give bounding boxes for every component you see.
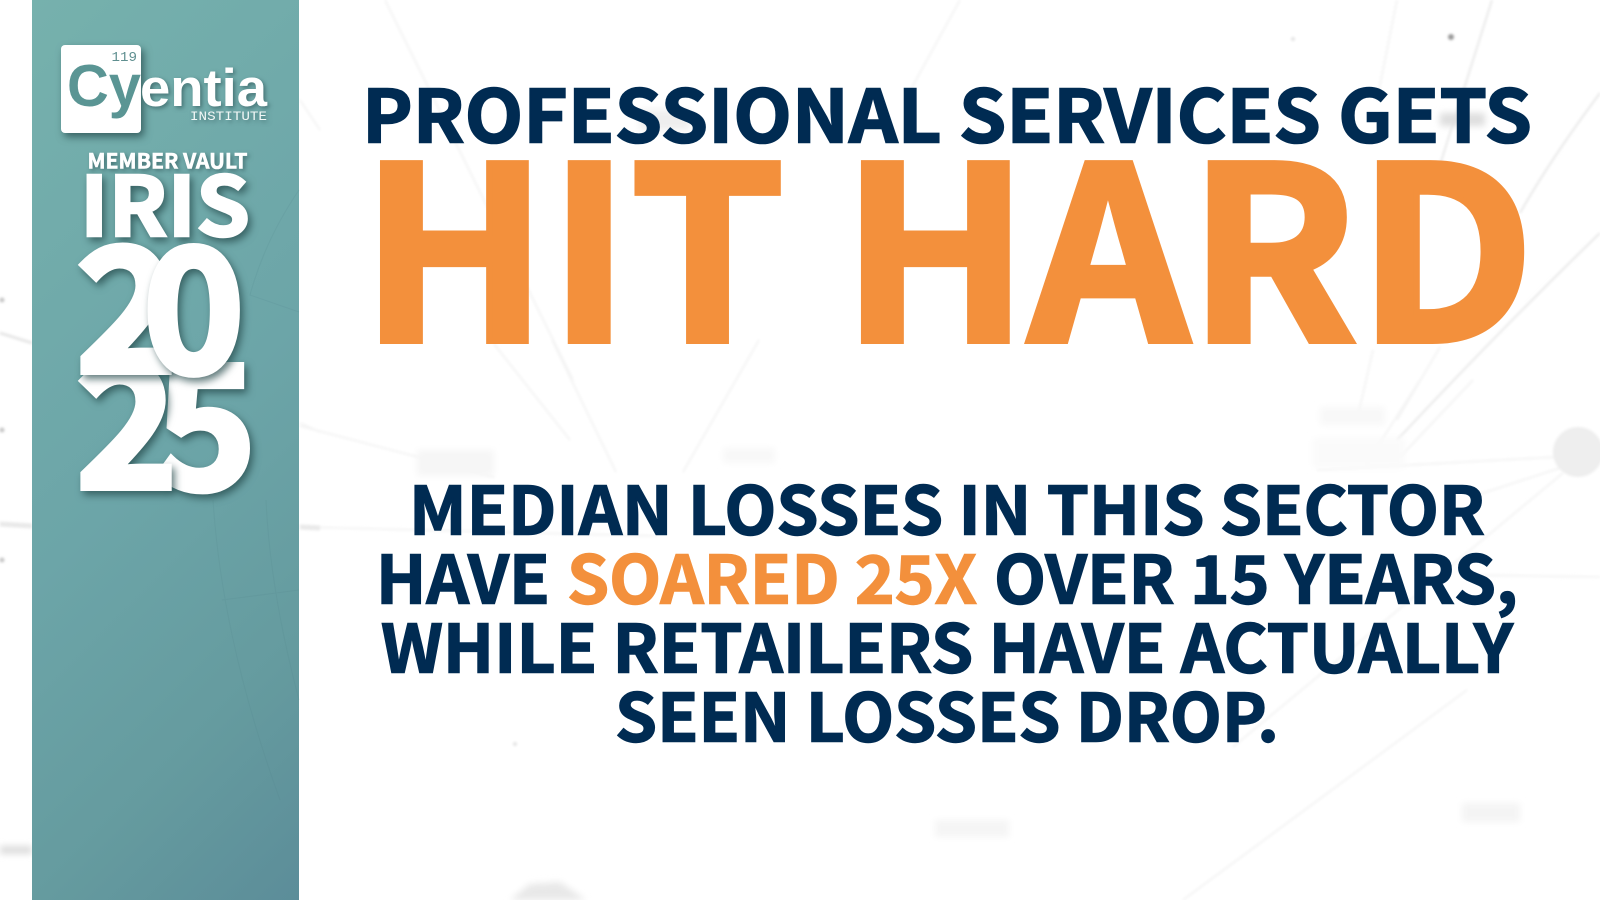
body line 1: MEDIAN LOSSES IN THIS SECTOR (409, 458, 1485, 554)
sidebar year 2025 (76, 172, 256, 539)
digit 0: 0 (143, 172, 244, 422)
sidebar label: IRIS: IRIS (80, 141, 250, 260)
sidebar label: member vault: MEMBER VAULT (88, 146, 248, 176)
logo element number: 119 (112, 51, 137, 66)
digit 5: 5 (155, 289, 256, 539)
logo subtitle: INSTITUTE (190, 109, 267, 124)
body line 2 start: HAVE (376, 528, 550, 624)
body line 4: SEEN LOSSES DROP. (615, 666, 1279, 762)
digit 2 lower: 2 (76, 288, 177, 538)
body highlight: SOARED 25X (567, 528, 977, 624)
headline: hit hard: HIT HARD (360, 64, 1534, 411)
logo: Cyentia Institute (61, 45, 268, 133)
body line 2 end: OVER 15 YEARS, (994, 528, 1518, 624)
logo letters entia: entia (140, 59, 268, 118)
panel: sidebar (32, 0, 299, 900)
logo letters Cy: Cy (67, 53, 141, 119)
logo tile (61, 45, 141, 133)
title line: PROFESSIONAL SERVICES GETS (362, 58, 1532, 164)
body line 3: WHILE RETAILERS HAVE ACTUALLY (381, 596, 1514, 692)
digit 2 upper: 2 (76, 172, 177, 422)
body text (376, 458, 1518, 762)
